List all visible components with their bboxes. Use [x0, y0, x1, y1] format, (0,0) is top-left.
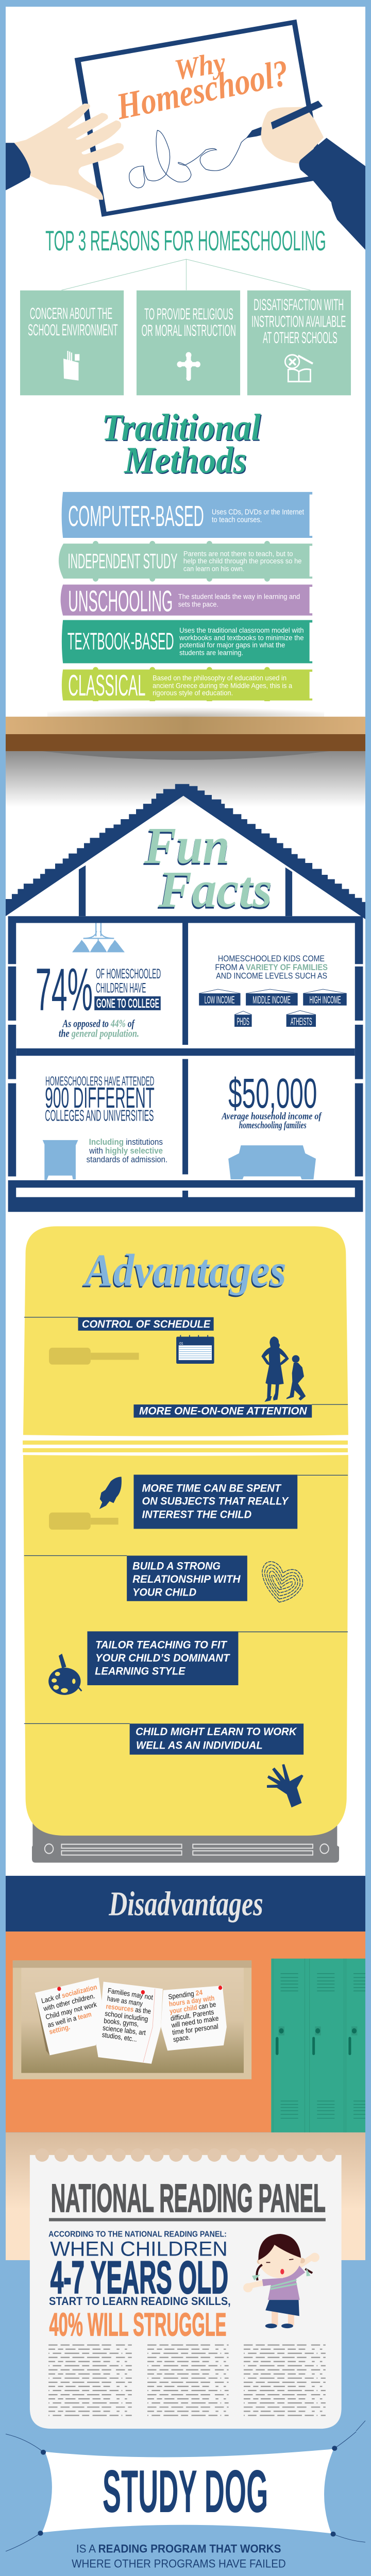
fact: 74% gone to college: GONE TO COLLEGE [96, 996, 159, 1011]
icon: sofa [228, 1145, 316, 1179]
icon: rocket [99, 1477, 122, 1509]
door handle bottom [49, 1513, 119, 1530]
reason box: school environment: CONCERN ABOUT THE [30, 305, 112, 323]
label: tailor teaching [87, 1631, 348, 1685]
headline: WHEN CHILDREN [50, 2238, 228, 2260]
label: control of schedule [24, 1317, 214, 1331]
heading: Traditional Methods: Traditional [102, 407, 261, 448]
sign: high income [303, 989, 347, 1006]
disadvantages banner: Disadvantages [108, 1885, 263, 1923]
note: resources: have as many [107, 1994, 143, 2008]
method: independent study: INDEPENDENT STUDY [68, 550, 177, 573]
label: strong relationship: BUILD A STRONG [132, 1561, 221, 1572]
fridge vents [45, 1844, 329, 1855]
fact: 74% gone to college: CHILDREN HAVE [96, 980, 146, 996]
fact: $50,000 income [221, 1070, 323, 1130]
icon: child hand [267, 1764, 303, 1807]
method: unschooling: UNSCHOOLING [68, 584, 173, 618]
method: computer-based: Uses CDs, DVDs or the Internet [212, 508, 304, 517]
label: more time on subjects: INTEREST THE CHILD [142, 1509, 251, 1521]
left sleeve [6, 143, 31, 190]
fact: 900 colleges [45, 1074, 167, 1164]
icon: paint palette [48, 1654, 81, 1695]
newspaper [30, 2148, 342, 2429]
note: socialization: setting. [48, 2023, 71, 2036]
label: strong relationship: YOUR CHILD [132, 1587, 196, 1599]
icon: calendar: 01 [179, 1341, 183, 1346]
method: independent study: Parents are not there to teach, but to [183, 550, 293, 557]
reason box: dissatisfaction [247, 291, 351, 395]
label: strong relationship: RELATIONSHIP WITH [132, 1573, 241, 1585]
fact: 900 colleges: COLLEGES AND UNIVERSITIES [45, 1107, 154, 1124]
fridge base [32, 1822, 339, 1862]
fact: 900 colleges: Including institutions [89, 1138, 163, 1147]
white panel [6, 7, 365, 1876]
house roof [6, 784, 365, 919]
heading: Traditional Methods: Methods [125, 441, 247, 482]
bulletin board [13, 1960, 251, 2079]
fact: 74% gone to college: 74% [36, 956, 93, 1023]
method: classical: ancient Greece during the Middle Ages, this is a [153, 682, 292, 689]
note: 24 hours: space. [173, 2033, 191, 2043]
fridge lower door [23, 1455, 348, 1836]
lockers [271, 1959, 365, 2132]
sign: atheists [286, 1010, 316, 1027]
heading: Fun Facts [143, 817, 272, 920]
label: learn as an individual: CHILD MIGHT LEARN TO WORK [136, 1726, 297, 1738]
heading: Traditional Methods: Methods [124, 440, 246, 481]
right sleeve [299, 138, 365, 250]
headline: ACCORDING TO THE NATIONAL READING PANEL: [48, 2230, 227, 2239]
heading: Traditional Methods [102, 407, 262, 482]
left hand [14, 104, 124, 200]
tagline: WHERE OTHER PROGRAMS HAVE FAILED [72, 2557, 286, 2570]
method: textbook-based: workbooks and textbooks to minimize the [179, 634, 304, 641]
fact: variety of families: AND INCOME LEVELS SUCH AS [216, 971, 327, 981]
method: computer-based: to teach courses. [212, 516, 262, 524]
section: fun facts house [6, 784, 365, 1212]
fact: 74% gone to college: the general population. [59, 1028, 139, 1040]
tan wall [6, 2132, 365, 2260]
handwriting abc [129, 130, 251, 188]
heading: Fun Facts: Facts [158, 860, 272, 918]
reason box: religious instruction: OR MORAL INSTRUCTION [142, 322, 236, 340]
label: learn as an individual: WELL AS AN INDIVIDUAL [136, 1740, 263, 1752]
method: textbook-based [62, 620, 312, 663]
reason box: school environment [20, 291, 124, 395]
note: 24 hours: your child can be [169, 2000, 216, 2015]
method: textbook-based: Uses the traditional classroom model with [179, 626, 304, 634]
fact: variety of families: HOMESCHOOLED KIDS COME [218, 954, 325, 964]
note: resources [96, 1982, 163, 2064]
heading: Fun Facts: Fun [144, 817, 229, 874]
label: tailor teaching: TAILOR TEACHING TO FIT [95, 1639, 227, 1651]
heading: Advantages: Advantages [83, 1245, 286, 1296]
icon: calendar [176, 1335, 214, 1364]
note: resources: Families may not [107, 1986, 154, 2002]
note: socialization: as well in a team [47, 2010, 92, 2029]
fridge upper door [23, 1226, 348, 1436]
locker lower vents [281, 2101, 365, 2119]
note: 24 hours: difficult. Parents [170, 2008, 214, 2023]
rope end [356, 2421, 365, 2431]
reason box: religious instruction [137, 291, 240, 395]
right hand with pen [246, 100, 324, 163]
note: 24 hours [161, 1986, 227, 2050]
icon: ceiling lamp [72, 923, 125, 952]
note: 24 hours: will need to make [171, 2014, 219, 2029]
icon: cross [177, 352, 200, 381]
title: Why Homeschool: Why [173, 46, 228, 87]
headline [48, 2230, 231, 2308]
method: unschooling: The student leads the way in learning and [178, 592, 300, 600]
note: resources: studios, etc... [102, 2030, 138, 2043]
method: classical: CLASSICAL [68, 669, 145, 702]
method: classical: Based on the philosophy of education used in [153, 674, 286, 682]
note: socialization: Child may not work [45, 2000, 97, 2021]
label: one-on-one attention [133, 1404, 348, 1418]
method: independent study [59, 541, 312, 582]
banner [6, 2432, 365, 2551]
fact: 900 colleges: HOMESCHOOLERS HAVE ATTENDED [45, 1074, 154, 1089]
label: learn as an individual [24, 1724, 303, 1755]
label: more time on subjects [133, 1475, 348, 1529]
fact: 900 colleges: 900 DIFFERENT [45, 1081, 155, 1114]
title: Why Homeschool: Homeschool? [113, 52, 292, 128]
heading: Fun Facts: Fun [143, 819, 229, 876]
fact: $50,000 income: homeschooling families [239, 1120, 307, 1130]
reason box: school environment: SCHOOL ENVIRONMENT [28, 321, 118, 339]
wooden shelf [6, 701, 365, 807]
sign: middle income: MIDDLE INCOME [252, 994, 291, 1006]
sign: PhDs: PHDS [237, 1016, 249, 1027]
section: national reading panel [6, 2101, 365, 2431]
note: 24 hours: time for personal [172, 2022, 219, 2037]
method: independent study: help the child through the process so he [183, 557, 301, 565]
label: tailor teaching: YOUR CHILD’S DOMINANT [95, 1652, 230, 1664]
sign: atheists: ATHEISTS [291, 1016, 312, 1027]
connector lines [61, 259, 310, 290]
note: 24 hours: Spending 24 [168, 1988, 203, 2001]
note: resources: resources as the [106, 2002, 151, 2015]
door handle top [49, 1348, 139, 1365]
heading: Fun Facts: Facts [157, 862, 272, 920]
sign: middle income [246, 989, 298, 1006]
icon: cigarette pack [63, 351, 79, 381]
section: lower fridge and disadvantages [6, 1654, 365, 2132]
tagline [72, 2543, 286, 2570]
note: socialization: with other children. [42, 1992, 96, 2013]
method: textbook-based: potential for major gaps in what the [179, 641, 285, 649]
label: one-on-one attention: MORE ONE-ON-ONE ATTENTION [139, 1405, 308, 1417]
headline: START TO LEARN READING SKILLS, [49, 2295, 231, 2308]
method: computer-based [62, 492, 312, 538]
clipboard frame [75, 20, 324, 217]
illustration: girl [243, 2234, 319, 2328]
reason box: religious instruction: TO PROVIDE RELIGIOUS [144, 306, 233, 323]
note: resources: school including [105, 2009, 148, 2023]
sign: low income [199, 989, 241, 1006]
fact: variety of families: FROM A VARIETY OF FAMILIES [215, 962, 328, 972]
heading: Advantages: Advantages [82, 1247, 285, 1298]
note: socialization [35, 1977, 102, 2055]
fact: 74% gone to college [36, 956, 161, 1040]
icon: crossed book [285, 355, 313, 382]
tagline: IS A READING PROGRAM THAT WORKS [76, 2543, 281, 2555]
fact: variety of families [199, 954, 347, 1027]
section: traditional methods [6, 407, 365, 807]
label: tailor teaching: LEARNING STYLE [95, 1666, 186, 1677]
sign: low income: LOW INCOME [205, 994, 235, 1006]
method: classical [62, 667, 312, 703]
icon: side table [43, 1140, 78, 1180]
section: study dog [6, 2432, 365, 2576]
fact: 900 colleges: with highly selective [89, 1146, 163, 1156]
label: strong relationship [24, 1555, 247, 1601]
method: computer-based: COMPUTER-BASED [68, 499, 204, 532]
note: 24 hours: hours a day with [168, 1994, 215, 2008]
fact: $50,000 income: $50,000 [228, 1070, 317, 1117]
heading: Traditional Methods: Traditional [103, 408, 262, 449]
sign: high income: HIGH INCOME [310, 994, 341, 1006]
method: independent study: can learn on his own. [183, 565, 244, 573]
method: unschooling: sets the pace. [178, 600, 218, 608]
disadvantages banner [6, 1876, 365, 1931]
icon: mother and child silhouette [261, 1336, 306, 1402]
label: more time on subjects: ON SUBJECTS THAT REALLY [142, 1496, 290, 1507]
note: resources: books, gyms, [104, 2016, 139, 2028]
icon: fingerprint heart [262, 1562, 302, 1602]
method: textbook-based: students are learning. [179, 649, 243, 656]
newspaper text columns [48, 2345, 326, 2415]
label: more time on subjects: MORE TIME CAN BE SPENT [142, 1483, 282, 1495]
method: textbook-based: TEXTBOOK-BASED [68, 628, 174, 655]
sign: PhDs [234, 1011, 252, 1027]
method: classical: rigorous style of education. [153, 689, 233, 697]
house frame [8, 866, 363, 1212]
fact: $50,000 income: Average household income of [221, 1111, 323, 1122]
section: advantages fridge [23, 1226, 348, 1862]
note: socialization: Lack of socialization [41, 1982, 98, 2005]
orange wall [6, 1931, 365, 2132]
fact: 900 colleges: standards of admission. [87, 1155, 167, 1164]
label: control of schedule: CONTROL OF SCHEDULE [82, 1318, 211, 1330]
fact: 74% gone to college: OF HOMESCHOOLED [96, 967, 161, 981]
section: hero and top 3 reasons [6, 20, 365, 395]
fact: 74% gone to college: As opposed to 44% of [62, 1018, 135, 1030]
note: resources: science labs, art [103, 2024, 146, 2037]
fridge seal stripes [23, 1440, 348, 1452]
